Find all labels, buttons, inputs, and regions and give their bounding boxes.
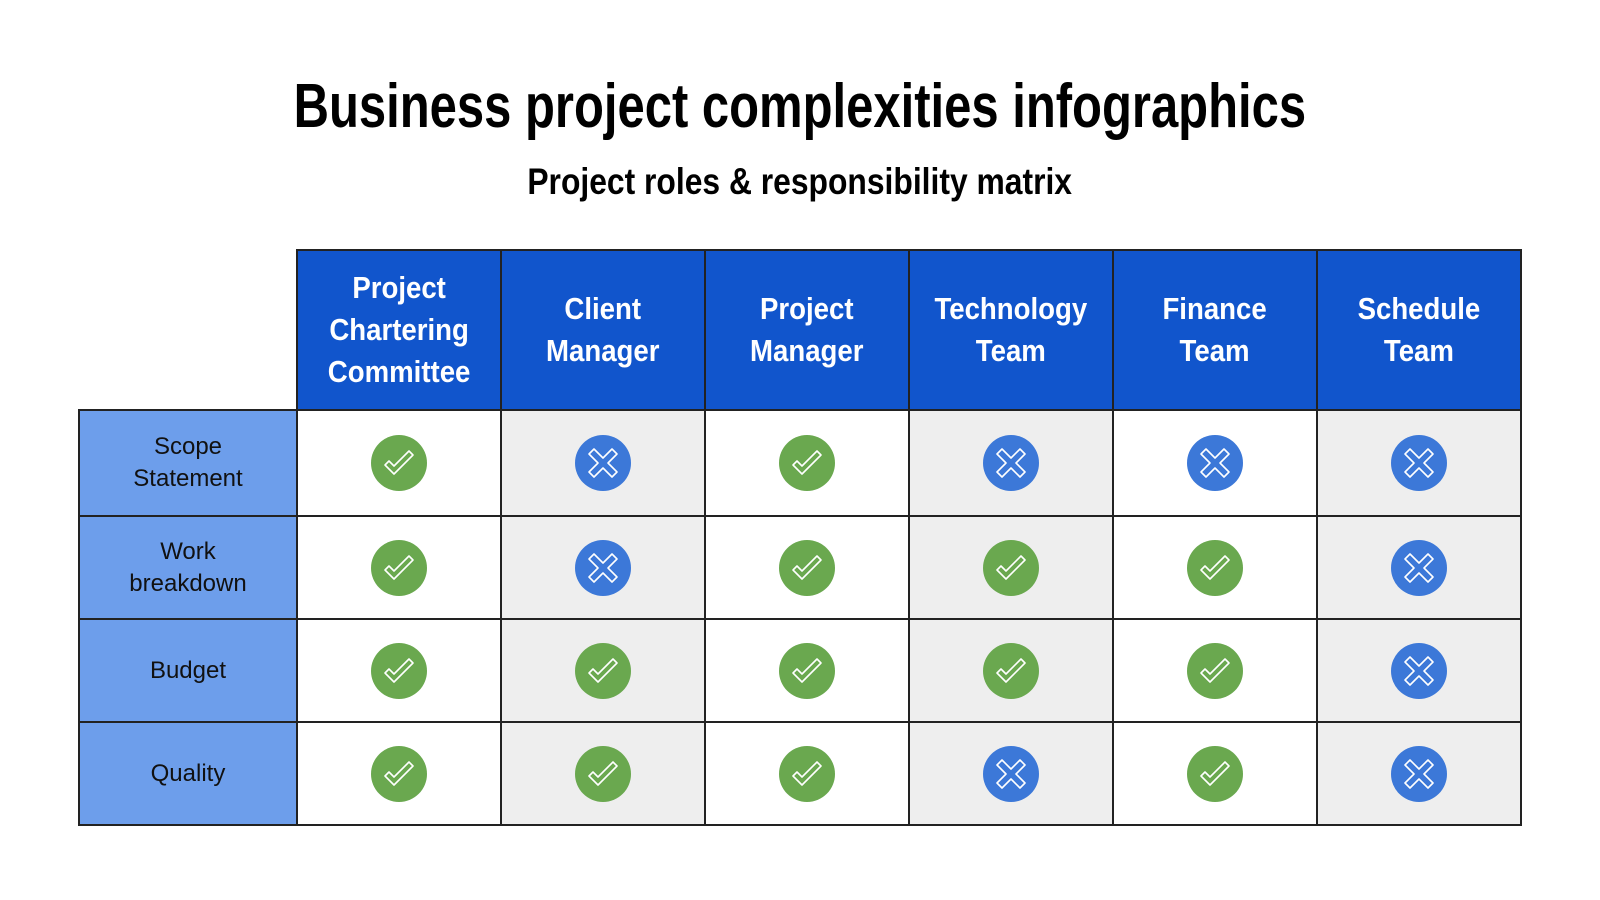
title: Business project complexities infographics bbox=[294, 72, 1306, 141]
row label: Scope Statement: Scope bbox=[154, 433, 222, 460]
row: Quality bbox=[298, 723, 1522, 826]
header: Client Manager: Client bbox=[565, 291, 641, 326]
header: Technology Team bbox=[908, 249, 1114, 411]
row label: Work breakdown: breakdown bbox=[129, 570, 247, 596]
header: Finance Team: Team bbox=[1180, 333, 1250, 368]
header: Project Chartering Committee: Chartering bbox=[329, 312, 469, 347]
row label: Scope Statement: Statement bbox=[133, 465, 243, 492]
header: Client Manager bbox=[500, 249, 706, 411]
row label: Work breakdown bbox=[78, 515, 298, 620]
header: Project Chartering Committee: Committee bbox=[328, 354, 470, 389]
row label: Work breakdown: Work bbox=[160, 538, 216, 564]
header: Project Manager bbox=[704, 249, 910, 411]
header: Project Chartering Committee: Project bbox=[352, 270, 446, 305]
header: Schedule Team bbox=[1316, 249, 1522, 411]
header: Client Manager: Manager bbox=[546, 333, 660, 368]
subtitle: Project roles & responsibility matrix bbox=[528, 161, 1072, 202]
header: Project Manager: Manager bbox=[750, 333, 864, 368]
header: Finance Team bbox=[1112, 249, 1318, 411]
header: Technology Team: Technology bbox=[935, 291, 1087, 326]
row: Scope Statement bbox=[371, 411, 1522, 515]
header: Technology Team: Team bbox=[976, 333, 1046, 368]
row: Budget bbox=[371, 620, 1522, 721]
header: Project Manager: Project bbox=[760, 291, 854, 326]
row: Work breakdown bbox=[371, 517, 1522, 618]
row label: Budget bbox=[78, 618, 298, 723]
row label: Quality bbox=[78, 721, 298, 826]
header: Finance Team: Finance bbox=[1163, 291, 1267, 326]
row label: Budget: Budget bbox=[150, 656, 226, 684]
header: Project Chartering Committee bbox=[296, 249, 502, 411]
header: Schedule Team: Schedule bbox=[1358, 291, 1480, 326]
header: Schedule Team: Team bbox=[1384, 333, 1454, 368]
row label: Scope Statement bbox=[78, 409, 298, 517]
row label: Quality: Quality bbox=[151, 760, 225, 786]
